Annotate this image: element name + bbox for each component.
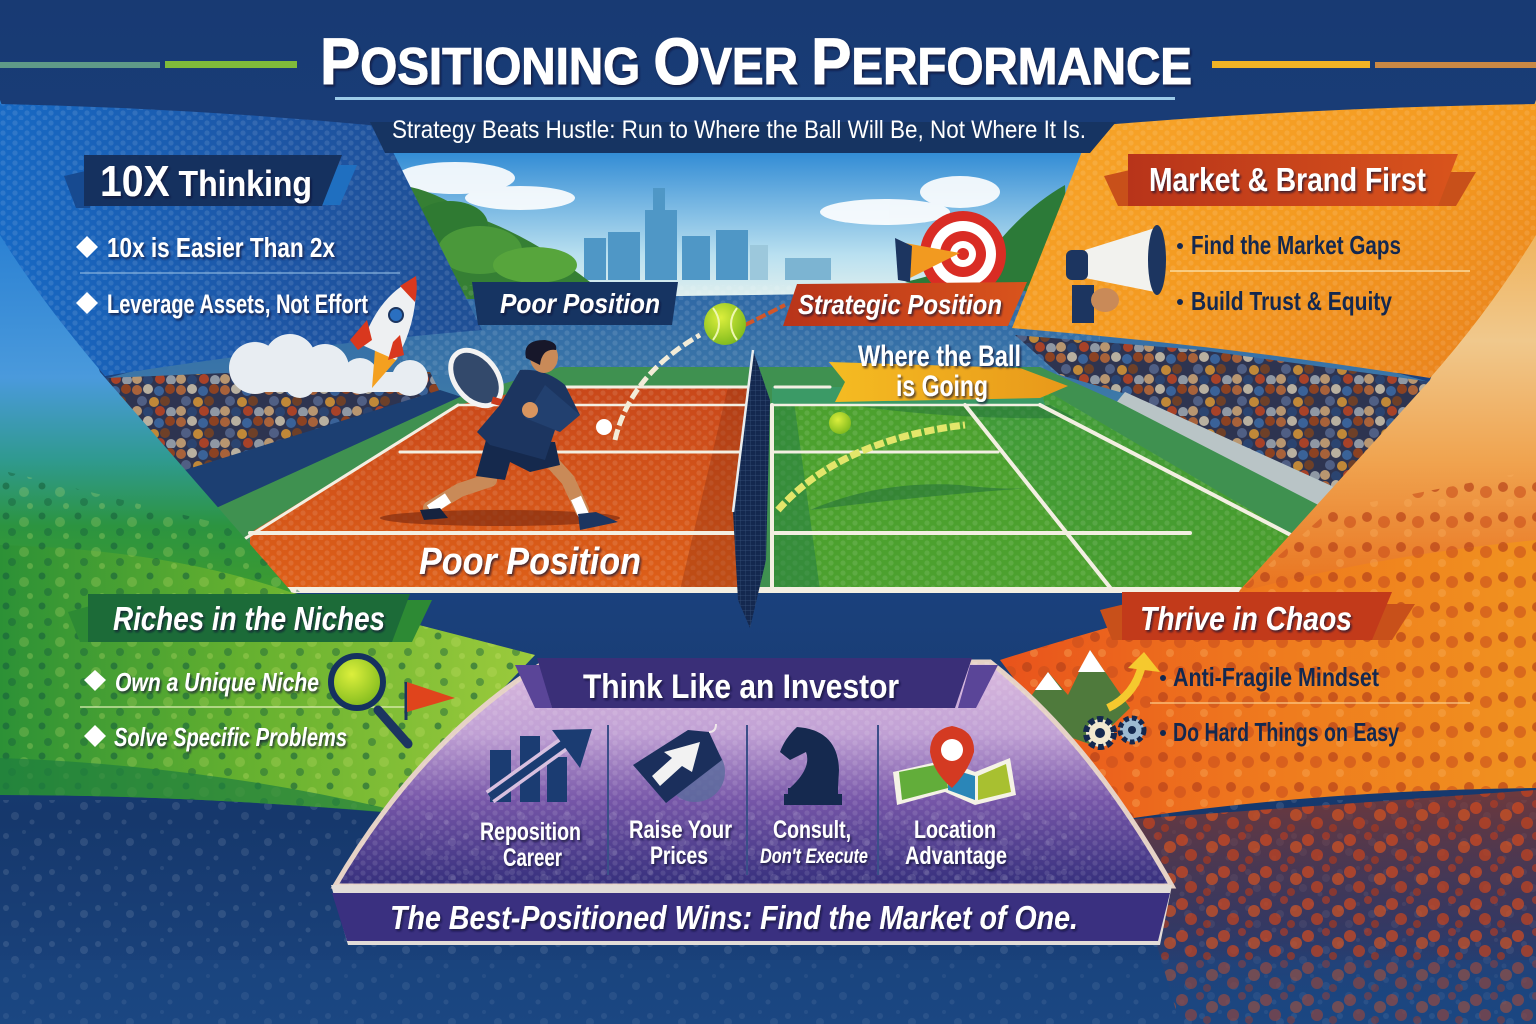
- panel content: Thrive in Chaos: Thrive in Chaos: [1140, 600, 1352, 637]
- raise prices text: Prices: [650, 842, 708, 870]
- consult text: [760, 816, 868, 868]
- barrier right: [1115, 392, 1345, 512]
- consult text: Don't Execute: [760, 845, 868, 868]
- grass court: [772, 387, 1310, 590]
- heading ribbon: [515, 658, 998, 708]
- panel: Thrive in Chaos background: [1000, 540, 1536, 820]
- icon: megaphone: [1066, 225, 1166, 323]
- location text: Advantage: [905, 842, 1007, 870]
- panel: 10X Thinking background: [0, 104, 482, 376]
- stadium backdrop: [100, 290, 1440, 520]
- clouds: [395, 162, 1000, 225]
- jacket: [477, 370, 580, 460]
- court lines: [240, 387, 1310, 590]
- panel: Think Like an Investor: [335, 658, 1172, 886]
- panel content: Market and Brand First: Build Trust & Equity: [1191, 286, 1392, 316]
- center stadium scene: [100, 150, 1440, 592]
- crowd right: [1015, 335, 1432, 492]
- head: [530, 341, 558, 373]
- tennis balls: [596, 303, 851, 435]
- panel content: Market and Brand First: [1104, 154, 1476, 316]
- clay court: [250, 387, 752, 590]
- label: Strategic Position: Strategic Position: [798, 289, 1002, 320]
- shorts: [476, 440, 560, 480]
- panel content: Riches in the Niches: Riches in the Niches: [113, 600, 385, 637]
- title: [0, 24, 1536, 100]
- heading ribbon: Think Like an Investor: [583, 668, 899, 706]
- label: Poor Position top: Poor Position: [500, 288, 660, 319]
- panel content: Thrive in Chaos: Anti-Fragile Mindset: [1173, 662, 1379, 692]
- panel content: 10X Thinking: Leverage Assets, Not Effort: [107, 289, 368, 319]
- panel content: Market and Brand First: Market & Brand First: [1149, 161, 1426, 198]
- location text: Location: [914, 816, 996, 844]
- panel content: Riches in the Niches: Own a Unique Niche: [115, 667, 319, 697]
- consult text: Consult,: [773, 816, 851, 844]
- panel content: Market and Brand First: Find the Market Gaps: [1191, 230, 1401, 260]
- raise prices text: Raise Your: [629, 816, 732, 844]
- panel content: Riches in the Niches: Solve Specific Problems: [114, 722, 347, 752]
- trees: [400, 185, 1070, 300]
- panel content: Thrive in Chaos: Do Hard Things on Easy: [1173, 717, 1399, 747]
- label: Where the Ball is Going: Where the Ball: [858, 340, 1021, 373]
- panel: Riches in the Niches background: [0, 545, 535, 812]
- label: Poor Position court: Poor Position: [419, 541, 641, 583]
- subtitle banner: [370, 116, 1116, 153]
- court surround: [203, 367, 1332, 592]
- city skyline: [584, 188, 831, 280]
- side columns: [0, 100, 1536, 610]
- location text: [905, 816, 1007, 870]
- crowd left: [105, 372, 440, 470]
- reposition text: [480, 818, 581, 872]
- icon: rocket with smoke: [229, 276, 428, 398]
- icon: price tag: [633, 724, 725, 803]
- label: Where the Ball is Going: is Going: [896, 370, 988, 403]
- icon: magnifier and flag: [331, 656, 455, 744]
- reposition text: Career: [503, 844, 562, 872]
- icon: tennis player: [380, 340, 620, 530]
- icon: chess knight: [780, 727, 842, 805]
- ball trajectories: [615, 305, 965, 510]
- label: Strategic Position: [783, 282, 1027, 326]
- sky: [380, 150, 1100, 300]
- wall left: [185, 390, 465, 515]
- panel: Market and Brand First background: [1012, 104, 1536, 378]
- panel content: 10X Thinking: 10x is Easier Than 2x: [107, 232, 335, 263]
- label: Where the Ball is Going: [829, 340, 1068, 403]
- icon: target with megaphone: [895, 211, 1006, 297]
- panel content: Thrive in Chaos: [1100, 592, 1470, 747]
- icon: growth chart: [490, 729, 592, 802]
- icon: mountains gears arrow: [1020, 650, 1160, 747]
- reposition text: Reposition: [480, 818, 581, 846]
- racket: [440, 341, 512, 415]
- panel content: 10X Thinking: 10X Thinking: [100, 157, 312, 206]
- panel content: 10X Thinking: [64, 155, 400, 319]
- icon: map pin: [893, 726, 1016, 805]
- title: POSITIONING OVER PERFORMANCE: [320, 24, 1192, 98]
- bottom banner: [331, 885, 1172, 945]
- subtitle banner: Strategy Beats Hustle: Run to Where the Ball Will Be, Not Where It Is.: [392, 116, 1086, 144]
- label: Poor Position top: [472, 282, 678, 325]
- tennis net: [733, 350, 770, 628]
- panel content: Riches in the Niches: [68, 594, 432, 752]
- raise prices text: [629, 816, 732, 870]
- legs: [430, 480, 490, 508]
- bottom banner: The Best-Positioned Wins: Find the Market of One.: [390, 899, 1078, 936]
